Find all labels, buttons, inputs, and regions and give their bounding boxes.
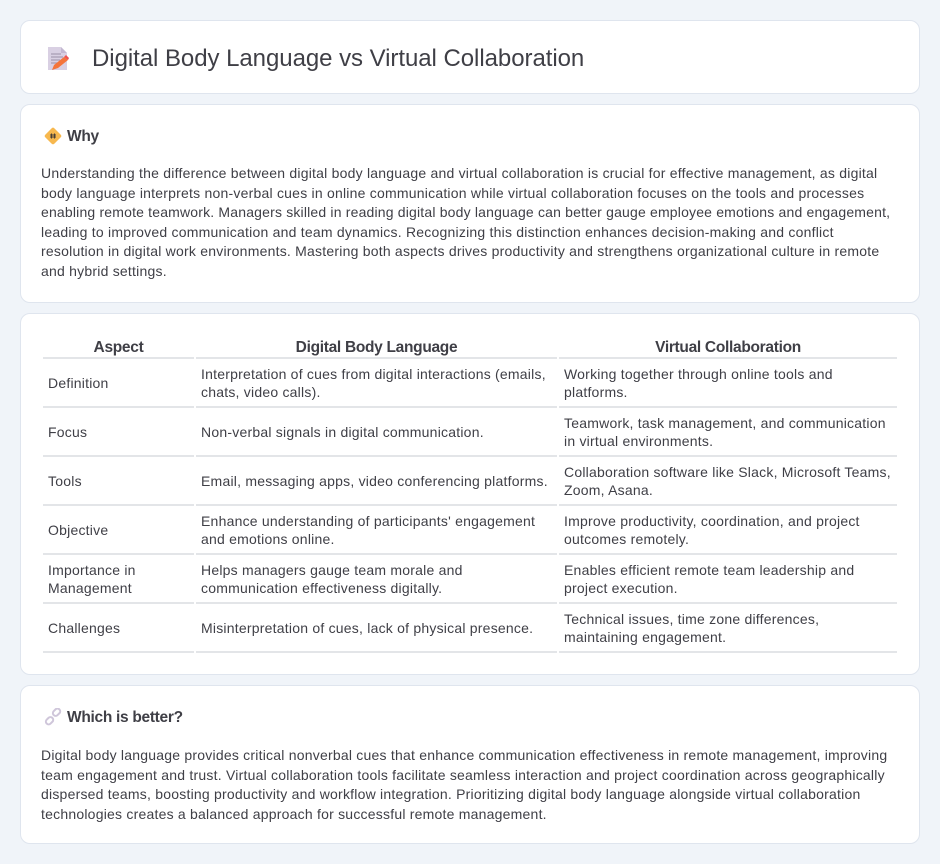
row: definition: Interpretation of cues from digital interactions (emails, (201, 366, 546, 382)
row: importance in management: Helps managers gauge team morale and (201, 562, 463, 578)
row: importance in management: Importance in (48, 562, 136, 578)
row: challenges: Misinterpretation of cues, lack of physical presence. (201, 620, 533, 636)
row: importance in management: communication effectiveness digitally. (201, 580, 442, 596)
row: importance in management: Management (48, 580, 132, 596)
row: importance in management (48, 562, 854, 596)
why paragraph: enabling remote teamwork. Managers skilled in reading digital body language can better gauge employee emotions and engagement, (41, 204, 890, 220)
why paragraph: body language interprets non-verbal cues in online communication while virtual collaboration focuses on the tools and processes (41, 185, 864, 201)
row: objective: Enhance understanding of participants' engagement (201, 513, 535, 529)
row: tools: Email, messaging apps, video conferencing platforms. (201, 473, 548, 489)
row: definition: chats, video calls). (201, 384, 321, 400)
row: focus (48, 415, 886, 449)
row: objective: outcomes remotely. (564, 531, 689, 547)
why paragraph: Understanding the difference between digital body language and virtual collaboration is crucial for effective management, as digital (41, 165, 877, 181)
row: challenges: Challenges (48, 620, 120, 636)
table header row: Digital Body Language (296, 339, 457, 356)
row: definition: Definition (48, 375, 109, 391)
row: importance in management: Enables efficient remote team leadership and (564, 562, 854, 578)
why paragraph (41, 165, 890, 279)
title: Digital Body Language vs Virtual Collaboration (92, 45, 584, 72)
panel: comparison table (20, 313, 920, 675)
which is better paragraph: Digital body language provides critical nonverbal cues that enhance communication effectiveness in remote management, improving (41, 747, 887, 763)
which is better paragraph (41, 747, 887, 822)
table header row: Aspect (94, 339, 143, 356)
row: challenges: maintaining engagement. (564, 629, 726, 645)
icon: link (44, 708, 62, 726)
row: objective: and emotions online. (201, 531, 335, 547)
row: tools (48, 464, 891, 498)
row: challenges (48, 611, 819, 645)
heading: why: Why (67, 128, 99, 145)
row: tools: Collaboration software like Slack, Microsoft Teams, (564, 464, 891, 480)
row: tools: Zoom, Asana. (564, 482, 653, 498)
table header row: Virtual Collaboration (655, 339, 801, 356)
row: definition: Working together through online tools and (564, 366, 833, 382)
header panel (20, 20, 920, 94)
why paragraph: and hybrid settings. (41, 263, 167, 279)
row: focus: Non-verbal signals in digital communication. (201, 424, 484, 440)
row: focus: in virtual environments. (564, 433, 713, 449)
panel: which is better (20, 685, 920, 844)
row: definition: platforms. (564, 384, 628, 400)
row: focus: Teamwork, task management, and communication (564, 415, 886, 431)
row: importance in management: project execution. (564, 580, 678, 596)
row: tools: Tools (48, 473, 82, 489)
heading: which is better: Which is better? (67, 709, 183, 726)
which is better paragraph: technologies creates a balanced approach for successful remote management. (41, 806, 547, 822)
icon: warning diamond (44, 128, 62, 144)
icon: document with pencil (48, 47, 69, 70)
panel: why (20, 104, 920, 303)
which is better paragraph: dispersed teams, boosting productivity and workflow integration. Prioritizing digital body language alongside virtual collaboration (41, 786, 860, 802)
row: objective: Improve productivity, coordination, and project (564, 513, 860, 529)
which is better paragraph: team engagement and trust. Virtual collaboration tools facilitate seamless interaction and project coordination across geographically (41, 767, 885, 783)
row: definition (48, 366, 833, 400)
row: objective: Objective (48, 522, 108, 538)
row: challenges: Technical issues, time zone differences, (564, 611, 819, 627)
why paragraph: leading to improved communication and team dynamics. Recognizing this distinction enhances decision-making and conflict (41, 224, 834, 240)
why paragraph: resolution in digital work environments. Mastering both aspects drives productivity and strengthens organizational culture in remote (41, 243, 879, 259)
table header row (94, 339, 801, 356)
row: focus: Focus (48, 424, 87, 440)
row: objective (48, 513, 860, 547)
